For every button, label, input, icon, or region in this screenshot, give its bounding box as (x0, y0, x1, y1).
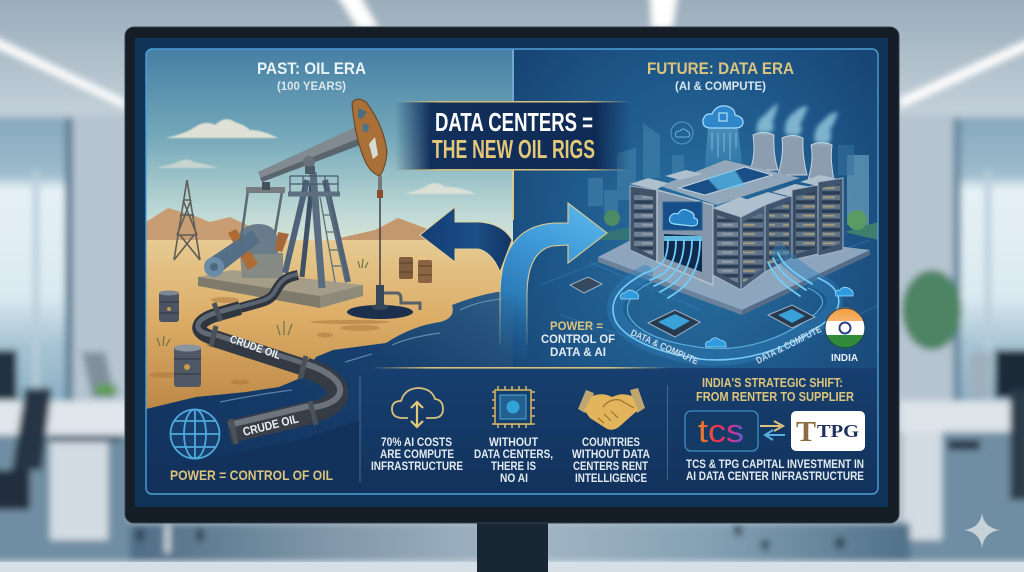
arrow: dark blue left turn (420, 207, 512, 272)
loop label: data and compute right: DATA & COMPUTE (754, 324, 824, 367)
city skyline (588, 123, 869, 225)
small loop clouds (620, 287, 853, 347)
text: countries without data centers: WITHOUT DATA (572, 449, 650, 461)
dunes (146, 208, 426, 240)
heading: past oil era: (100 YEARS) (277, 79, 346, 93)
barrel: dark near (174, 344, 201, 387)
clouds (156, 119, 476, 194)
panel border (146, 49, 878, 494)
logo: tpg: T (796, 417, 816, 448)
logo: tpg: TPG (817, 421, 859, 441)
text: tcs tpg investment (686, 459, 864, 483)
monitor stand (477, 520, 548, 572)
barrel: dark far (159, 290, 179, 322)
back server racks (745, 175, 843, 272)
india label: INDIA (831, 352, 858, 364)
cooling towers (750, 132, 834, 180)
icon: sparkle watermark (964, 513, 1000, 548)
sky (146, 49, 513, 244)
text: power control of data and ai: POWER = (550, 319, 603, 333)
heading: india strategic shift: INDIA'S STRATEGIC SHIFT: (702, 376, 843, 390)
banner line 2: THE NEW OIL RIGS (432, 134, 595, 164)
text: without data centers: NO AI (500, 473, 528, 485)
heading: future data era: (AI & COMPUTE) (675, 79, 766, 93)
water (147, 292, 513, 460)
concrete base (198, 270, 363, 308)
icon: handshake (578, 388, 645, 430)
heading: past oil era (257, 59, 366, 93)
text: power control of data and ai: CONTROL OF (541, 332, 615, 346)
microchips (570, 277, 815, 337)
text: without data centers: WITHOUT (489, 437, 538, 449)
pitman frame (240, 190, 285, 247)
barrels: upright brown (399, 257, 432, 283)
text: without data centers: DATA CENTERS, (474, 449, 553, 461)
monitor screen (135, 38, 888, 507)
panel: future data era (513, 50, 878, 368)
icon: cloud upload download (392, 388, 443, 427)
desert sand (146, 240, 513, 409)
steam (757, 103, 838, 144)
fiber data streams and loop (613, 240, 839, 360)
polished rod and wellhead (372, 176, 420, 310)
banner (395, 101, 631, 170)
arrow: light blue right turn (500, 203, 607, 358)
text: 70 percent ai costs: ARE COMPUTE (380, 449, 454, 461)
text: power control of data and ai (541, 319, 615, 359)
india flag (825, 307, 865, 349)
text: 70 percent ai costs (371, 437, 463, 473)
icon: chip (492, 386, 535, 428)
text: countries without data centers: COUNTRIES (582, 437, 640, 449)
front server rack (713, 197, 765, 290)
circuit floor lines (540, 240, 878, 360)
logo: tcs: tcs (698, 413, 744, 449)
walking beam (258, 126, 360, 190)
crude oil pipeline (198, 274, 340, 444)
platform (598, 240, 870, 315)
cloud icon with data beam (702, 105, 744, 168)
center vertical dividers (512, 49, 514, 220)
floor strip (0, 562, 1024, 572)
text: tcs tpg investment: TCS & TPG CAPITAL INVESTMENT IN (686, 459, 864, 471)
loop label: data and compute left: DATA & COMPUTE (629, 328, 700, 367)
text: countries without data centers: INTELLIGENCE (575, 473, 647, 485)
logo: tcs (685, 411, 758, 451)
heading: india strategic shift (696, 376, 854, 404)
text: countries without data centers: CENTERS RENT (573, 461, 648, 473)
text: 70 percent ai costs: 70% AI COSTS (381, 437, 452, 449)
heading: future data era: FUTURE: DATA ERA (647, 59, 794, 78)
text: without data centers: THERE IS (491, 461, 536, 473)
pipe label: crude oil lower: CRUDE OIL (241, 412, 300, 439)
text: tcs tpg investment: AI DATA CENTER INFRASTRUCTURE (686, 471, 864, 483)
central building front (657, 190, 713, 285)
left server rack (630, 186, 657, 262)
text: power control of data and ai: DATA & AI (550, 345, 606, 359)
icon: globe (170, 410, 220, 458)
gearbox and crank (204, 224, 289, 278)
heading: future data era (647, 59, 794, 93)
logo: tpg (791, 411, 865, 451)
data center roof (630, 160, 800, 205)
sand details (149, 297, 390, 384)
water ripples (220, 298, 512, 402)
banner line 1: DATA CENTERS = (435, 107, 593, 137)
heading: india strategic shift: FROM RENTER TO SUPPLIER (696, 390, 854, 404)
text: 70 percent ai costs: INFRASTRUCTURE (371, 461, 463, 473)
sand tufts (157, 259, 368, 346)
bottom band (146, 367, 878, 494)
main infographic panel (146, 49, 878, 500)
background oil derrick (174, 180, 200, 260)
text: power control of oil: POWER = CONTROL OF OIL (170, 467, 333, 483)
horsehead (352, 99, 387, 176)
oil puddle (347, 305, 413, 319)
small cloud circle (671, 122, 693, 144)
monitor bezel (125, 27, 899, 523)
trees (590, 210, 878, 240)
heading: past oil era: PAST: OIL ERA (257, 59, 366, 78)
pipe label: crude oil upper: CRUDE OIL (228, 333, 282, 362)
icon: exchange arrows (760, 421, 785, 440)
text: countries without data centers (572, 437, 650, 485)
text: without data centers (474, 437, 553, 485)
panel: past oil era (146, 49, 513, 500)
samson post derrick (285, 172, 348, 288)
